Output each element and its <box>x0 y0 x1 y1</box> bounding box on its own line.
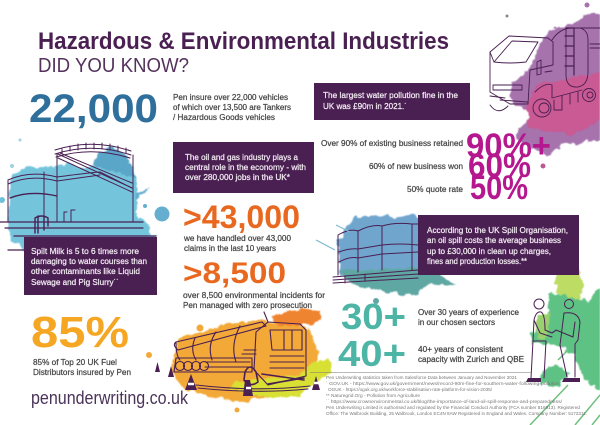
stats: retention, new business, quote rate: 60% of new business won <box>369 162 463 171</box>
stats: retention, new business, quote rate: 60% <box>468 147 531 185</box>
stat: 40+ years of capacity: capacity with Zurich and QBE <box>418 355 524 364</box>
stat: 8,500 incidents <box>183 257 325 310</box>
footnotes and sources <box>310 372 587 416</box>
footnotes and sources: Pen Underwriting statistics taken from Salesforce Data between January and November 2021 <box>326 375 518 380</box>
stat: 85% fuel distributors <box>31 308 131 377</box>
stat: 30+ years of experience: Over 30 years of experience <box>418 308 520 317</box>
stat: 43,000 claims: >43,000 <box>183 199 300 235</box>
illustration: oil drums on blue and teal splash <box>316 214 458 304</box>
callout: UK spill organisation: up to £30,000 in clean up charges, <box>427 247 551 256</box>
stat: 40+ years of capacity <box>338 333 524 374</box>
stat: 30+ years of experience: 30+ <box>341 296 406 337</box>
subtitle: DID YOU KNOW? <box>38 55 189 77</box>
stat: 22,000 vehicles: of which over 13,500 are Tankers <box>173 103 291 112</box>
stats: retention, new business, quote rate: 50% quote rate <box>407 185 464 194</box>
stat: 22,000 vehicles: / Hazardous Goods vehicles <box>173 113 275 122</box>
footnotes and sources: Pen Underwriting Limited is authorised and regulated by the Financial Conduct Authority (FCA number 816913). Registered <box>326 405 581 410</box>
stat: 8,500 incidents: >8,500 <box>183 257 286 290</box>
stat: 22,000 vehicles: Pen insure over 22,000 vehicles <box>173 93 288 102</box>
stat: 43,000 claims: claims in the last 10 years <box>184 244 276 253</box>
callout: oil and gas jobs <box>173 142 314 193</box>
callout: oil and gas jobs: over 280,000 jobs in the UK* <box>185 173 290 182</box>
illustration: handshake on green splash <box>526 268 600 425</box>
stats: retention, new business, quote rate <box>321 127 551 207</box>
website address: penunderwriting.co.uk <box>31 388 189 408</box>
illustration: tanker truck on purple splash <box>490 2 600 168</box>
callout: water pollution fine <box>314 83 470 120</box>
callout: water pollution fine: UK was £90m in 2021.˙ <box>323 102 407 111</box>
stat: 43,000 claims: we have handled over 43,000 <box>183 234 292 243</box>
stat: 30+ years of experience: in our chosen sectors <box>418 318 495 327</box>
callout: oil and gas jobs: central role in the economy - with <box>185 163 306 172</box>
illustration: storage tanks on blue splash <box>0 138 170 252</box>
stat: 85% fuel distributors: 85% of Top 20 UK Fuel <box>33 358 117 367</box>
stats: retention, new business, quote rate: 90%+ <box>466 127 551 165</box>
callout: spilt milk: Sewage and Pig Slurry˙˙ <box>31 278 119 287</box>
footnotes and sources: OGUK - https://oguk.org.uk/workforce-stabilisation-rate-platform-for-vision-2035/ <box>328 387 493 392</box>
footnotes and sources: Office: The Walbrook Building, 25 Walbrook, London EC4N 8AW Registered in England and Wales. Company Number: 5172311. <box>326 411 587 416</box>
callout: UK spill organisation: fines and production losses.** <box>427 257 527 266</box>
stat: 40+ years of capacity: 40+ years of consistent <box>418 345 504 354</box>
illustration: tanker lorry on orange splash <box>146 309 332 412</box>
callout: spilt milk: other contaminants like Liquid <box>31 267 140 276</box>
stat: 22,000 vehicles <box>29 87 291 131</box>
stat: 85% fuel distributors: Distributors insured by Pen <box>33 368 131 377</box>
callout: spilt milk: Spilt Milk is 5 to 6 times more <box>31 247 140 256</box>
footnotes and sources: ˙˙ https://www.crownenvironmental.co.uk/blog/the-importance-of-land-oil-spill-response-and-preparedness/ <box>326 399 563 404</box>
stats: retention, new business, quote rate: Over 90% of existing business retained <box>321 139 463 148</box>
callout: spilt milk: damaging to water courses than <box>31 257 147 266</box>
callout: spilt milk <box>24 237 157 295</box>
stat: 22,000 vehicles: 22,000 <box>29 87 158 131</box>
callout: oil and gas jobs: The oil and gas industry plays a <box>185 153 299 162</box>
footnotes and sources: ˙ GOV.UK - https://www.gov.uk/government/news/record-90m-fine-for-southern-water-following-pollution <box>326 381 561 386</box>
stat: 40+ years of capacity: 40+ <box>338 333 406 374</box>
callout: UK spill organisation: According to the UK Spill Organisation, <box>427 226 568 235</box>
title: Hazardous & Environmental Industries <box>38 28 449 55</box>
callout: UK spill organisation: an oil spill costs the average business <box>427 236 561 245</box>
stats: retention, new business, quote rate: 50% <box>470 169 528 207</box>
stat: 85% fuel distributors: 85% <box>31 308 129 357</box>
stat: 30+ years of experience <box>341 296 520 337</box>
callout: UK spill organisation <box>418 215 579 275</box>
stat: 8,500 incidents: Pen managed with zero prosecution <box>183 301 312 310</box>
stat: 8,500 incidents: over 8,500 environmental incidents for <box>183 291 325 300</box>
footnotes and sources: ** Naturegrid.Org - Pollution from Agriculture <box>326 393 421 398</box>
stat: 43,000 claims <box>183 199 300 253</box>
callout: water pollution fine: The largest water pollution fine in the <box>323 91 459 100</box>
